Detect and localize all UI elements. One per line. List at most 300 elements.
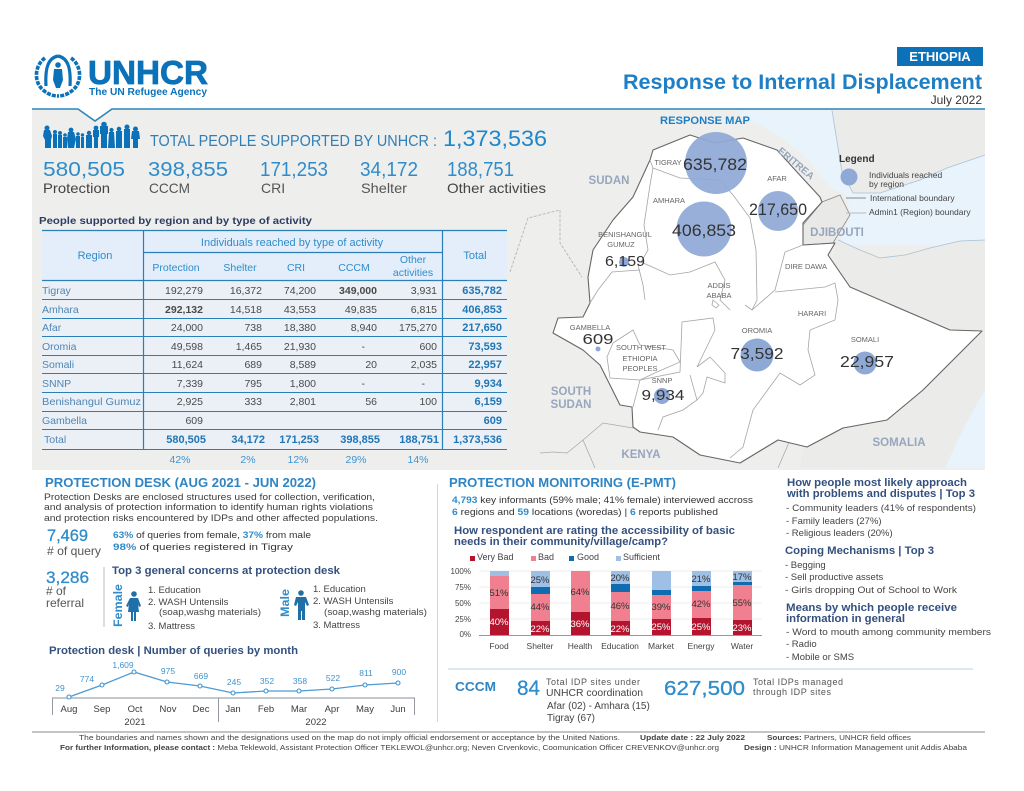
line chart: queries by month: 29 [55,683,65,693]
region labels: HARARI [798,309,826,318]
heading: queries by month: Protection desk | Number of queries by month [49,645,298,657]
country tag: ETHIOPIA [909,49,971,64]
list: approach: - Religious leaders (20%) [786,528,893,539]
bar: Education: 22% [610,624,630,635]
table row: Oromia: 21,930 [284,341,316,353]
figure: shelter [360,159,418,196]
bar: Shelter: 22% [530,624,550,635]
table row: Benishangul Gumuz: 6,159 [474,396,502,408]
stat: queries: 63% of queries from female, 37% from male [113,530,311,541]
table header: CCCM [338,262,370,274]
table row: percentages: 29% [345,454,367,466]
line chart: queries by month: 900 [392,667,406,677]
region labels: GAMBELLA [570,323,610,332]
region labels: ETHIOPIA [622,354,658,363]
table row: Tigray: 635,782 [462,285,502,297]
female concerns: 1. Education [148,585,201,596]
bubble: Tigray: 635,782 [683,155,747,174]
chart heading: How respondent are rating the accessibility of basic [454,525,735,537]
line chart: queries by month: 352 [260,676,274,686]
bar: Food [489,571,509,635]
list: information: - Word to mouth among community members [786,627,991,638]
description: and analysis of protection information to identify human rights violations [44,502,373,513]
table row: Tigray: 349,000 [339,285,377,297]
heading: PROTECTION MONITORING (E-PMT) [449,475,676,490]
Djibouti [803,195,850,245]
key informants text [452,495,753,518]
country labels: SOUTH [551,386,591,398]
bubble: Amhara [672,202,736,256]
female concerns: (soap,washg materials) [159,607,261,618]
key informants text: 6 regions and 59 locations (woredas) | 6 reports published [452,507,718,518]
table row: Afar [42,322,502,334]
stat: IDPs managed [664,677,843,700]
region labels: PEOPLES [622,364,658,373]
footer: The boundaries and names shown and the designations used on the map do not imply official endorsement or acceptance by the United Nations. [79,735,620,742]
figure: CCCM: 398,855 [148,159,228,181]
bar: Food: 51% [489,588,509,599]
bubble: Amhara: 406,853 [672,221,736,240]
map legend: International boundary [870,193,955,203]
heading: approach: How people most likely approach [787,477,967,489]
table row: Amhara: 43,553 [284,304,316,316]
table row: SNNP: SNNP [42,378,71,390]
table row: Total: Total [44,434,66,446]
table row: Afar: 24,000 [171,322,203,334]
figure: CRI [260,159,328,196]
bar: Shelter: 44% [530,602,550,613]
country labels: KENYA [621,449,661,461]
line chart: queries by month [52,660,415,728]
male concerns: 3. Mattress [313,620,360,631]
list: information: - Radio [786,639,817,650]
country labels: SUDAN [589,175,629,187]
footer: Design : UNHCR Information Management unit Addis Ababa [744,745,967,752]
stacked bar chart: Shelter [527,641,554,651]
table row: Total: 1,373,536 [453,434,502,446]
table row: Benishangul Gumuz: 2,801 [290,396,316,408]
male concerns [278,584,427,631]
line chart: queries by month: 811 [359,668,373,678]
table row: Amhara: 6,815 [411,304,437,316]
country labels [551,146,926,461]
table row: Total: 171,253 [279,434,319,446]
stacked bar chart: 50% [455,599,471,608]
heading: coping: Coping Mechanisms | Top 3 [785,545,934,557]
bubble: Somali [840,352,894,374]
bar: Health: 64% [570,587,590,598]
line chart: queries by month: 975 [161,666,175,676]
table row: Oromia: 600 [419,341,437,353]
figure: CRI: 171,253 [260,159,328,181]
lower right sea [945,390,985,468]
stat: referrals: # of [46,584,67,598]
region labels [570,158,879,385]
female concerns: 2. WASH Untensils [148,597,229,608]
bar: Energy [691,571,711,635]
region labels: SOUTH WEST [616,343,666,352]
bubble: Oromia [730,338,784,372]
table row: Benishangul Gumuz: 333 [244,396,262,408]
bar: Market [651,571,671,635]
table row: Benishangul Gumuz: 2,925 [177,396,203,408]
stat: IDP sites: 84 [517,677,540,700]
table row: Afar: 738 [244,322,262,334]
line chart: queries by month: Apr [325,704,339,715]
table row: Amhara [42,304,502,316]
figure: protection: Protection [43,180,110,196]
figure: CRI: CRI [261,180,285,196]
neighbouring borders [510,210,923,447]
table row: Gambella: Gambella [42,415,87,427]
table row: Gambella [42,415,502,427]
title block [623,47,983,107]
line chart: queries by month: Nov [160,704,177,715]
line chart: queries by month: Mar [291,704,307,715]
table row: SNNP [42,378,503,390]
line chart: queries by month: Jun [390,704,406,715]
table row: Somali: 22,957 [468,359,502,371]
table row: Tigray: 192,279 [165,285,203,297]
line chart: queries by month: Dec [193,704,210,715]
figure: other activities: Other activities [447,180,546,196]
table row: Oromia: Oromia [42,341,77,353]
bar: Education [610,571,630,635]
line chart: queries by month: Feb [258,704,274,715]
region labels: GUMUZ [607,240,635,249]
stat: referrals: 3,286 [46,568,89,587]
line chart: queries by month: Jan [225,704,241,715]
main title: Response to Internal Displacement [623,71,982,94]
region labels: AMHARA [653,196,685,205]
chart legend [470,552,660,562]
country labels: SUDAN [551,399,591,411]
table row: Benishangul Gumuz: 56 [365,396,377,408]
table row: Gambella: 609 [185,415,203,427]
country labels: DJIBOUTI [810,227,864,239]
region labels: SNNP [652,376,672,385]
table row: Total: 580,505 [166,434,206,446]
line chart: queries by month: 245 [227,677,241,687]
map legend: Legend [839,154,875,165]
key informants text: 4,793 key informants (59% male; 41% female) interviewed accross [452,495,753,506]
stat: IDP sites: Total IDP sites under [546,677,640,687]
stat: referrals [46,568,89,610]
figure: CCCM: CCCM [149,180,190,196]
heading: information: information in general [786,613,905,625]
line chart: queries by month: Sep [94,704,110,715]
region labels: ABABA [706,291,732,300]
list: approach [786,503,976,539]
bubble: Gambella: 609 [582,331,614,348]
table header: activities [393,267,433,279]
line chart: queries by month: 669 [194,671,208,681]
logo: UNHCR: UNHCR [88,54,208,91]
table row: percentages: 42% [169,454,191,466]
list: approach: - Family leaders (27%) [786,516,882,527]
bubble: SNNP: 9,934 [642,388,684,404]
bar: Education: 46% [610,601,630,612]
table row: Tigray: 16,372 [230,285,262,297]
table row: Oromia: - [362,341,366,353]
bar: Shelter [530,571,550,635]
chart legend: Sufficient [623,552,660,562]
table row: Tigray [42,285,502,297]
country tag [897,47,983,66]
country labels: SOMALIA [872,437,926,449]
stat: IDP sites: UNHCR coordination [546,688,643,699]
table header: Shelter [223,262,257,274]
table row: Benishangul Gumuz [42,396,502,408]
chart heading [454,525,735,548]
table row: SNNP: 7,339 [177,378,203,390]
table row: Total: 34,172 [231,434,265,446]
region labels: ADDIS [708,281,730,290]
stat: queries: 7,469 [47,526,88,545]
table header [78,237,487,279]
bar: Shelter: 25% [530,575,550,586]
region labels: SOMALI [851,335,879,344]
map: response map [510,110,985,468]
footer: Sources: Partners, UNHCR field offices [767,735,912,742]
panel: protection monitoring [449,475,762,651]
table row: Somali: Somali [42,359,74,371]
description [44,492,378,524]
line chart: queries by month: 522 [326,673,340,683]
figure: protection: 580,505 [43,159,125,181]
table row: percentages: 14% [407,454,429,466]
table row: Tigray: 74,200 [284,285,316,297]
bar: Energy: 25% [691,622,711,633]
table row: Amhara: 49,835 [345,304,377,316]
region labels: OROMIA [742,326,772,335]
table header: Individuals reached by type of activity [201,237,384,249]
stacked bar chart: Food [489,641,509,651]
Yemen coast [832,110,985,193]
headline: total people supported [43,122,547,151]
table row: Amhara: Amhara [42,304,79,316]
panel: protection desk [44,475,427,728]
panel: CCCM: CCCM [455,679,496,694]
date: July 2022 [931,93,982,107]
stat: referrals: referral [46,596,84,610]
footer: Update date : 22 July 2022 [640,735,745,742]
panel: CCCM [455,677,843,724]
country labels: ERITREA [775,146,816,182]
heading: information [786,602,957,625]
Ethiopia land [553,135,982,463]
footer: For further Information, please contact : Meba Teklewold, Assistant Protection Officer TEKLEWOL@unhcr.org; Neven Crvenkovic, Coomunication Officer CREVENKOV@unhcr.org [60,745,719,752]
bubble: Afar [749,191,807,231]
map legend: Individuals reached [869,170,943,180]
stacked bar chart: Market [648,641,675,651]
table row: Benishangul Gumuz: Benishangul Gumuz [42,396,141,408]
table row: Total: 398,855 [340,434,380,446]
stacked bar chart: Water [731,641,753,651]
icon: crowd of people [43,122,140,148]
stacked bar chart: Education [601,641,639,651]
region labels: TIGRAY [654,158,682,167]
heading: information: Means by which people receive [786,602,957,614]
stacked bar chart: 75% [455,583,471,592]
bar: Water: 17% [732,572,752,583]
figure: other activities [447,159,546,196]
table row: Oromia: 73,593 [468,341,502,353]
table header: Region [78,250,112,262]
table row: Afar: 175,270 [399,322,437,334]
footer [32,731,985,752]
chart heading: needs in their community/village/camp? [454,536,668,548]
line chart: queries by month: 1,609 [112,660,134,670]
table row: Tigray: 3,931 [411,285,437,297]
list: information [786,627,991,663]
bubble: Somali: 22,957 [840,354,894,371]
table row: Afar: 18,380 [284,322,316,334]
stat: IDP sites [517,677,650,724]
table header: Protection [152,262,200,274]
logo: UNHCR: The UN Refugee Agency [89,87,207,98]
headline: total people supported: TOTAL PEOPLE SUPPORTED BY UNHCR : [150,133,437,150]
stat: queries: # of query [47,544,101,558]
table row: Somali: 2,035 [411,359,437,371]
panel: grey summary and map background [32,109,985,470]
male concerns: Male [278,589,292,617]
bar: Health [570,571,590,635]
table row: percentages: 12% [287,454,309,466]
table row: Total [44,434,502,446]
table header: CRI [287,262,305,274]
table row: Benishangul Gumuz: 100 [419,396,437,408]
stat: IDPs managed: 627,500 [664,678,745,700]
bar: Health: 36% [570,619,590,630]
heading: approach: with problems and disputes | Top 3 [786,488,975,500]
bar: Market: 39% [651,602,671,613]
description: and protection risks encountered by IDPs and other affected populations. [44,513,378,524]
stat: IDPs managed: Total IDPs managed [753,677,843,687]
stat: queries: 98% of queries registered in Tigray [113,542,293,553]
bubble: Tigray [683,132,747,194]
table heading: People supported by region and by type of activity [39,215,312,227]
stacked bar chart: 0% [459,630,471,639]
table row: SNNP: - [422,378,426,390]
stat: IDP sites: Afar (02) - Amhara (15) [547,701,650,712]
stacked bar chart: 100% [451,567,471,576]
figure: other activities: 188,751 [447,159,514,181]
figure: CCCM [148,159,228,196]
panel: right column findings [785,477,991,663]
icon: male figure [294,590,309,620]
line chart: queries by month: 774 [80,674,94,684]
list: coping: - Sell productive assets [785,572,883,583]
stacked bar chart: Health [568,641,593,651]
icon: female figure [126,591,141,621]
table row: SNNP: 9,934 [474,378,503,390]
list: coping [785,560,957,596]
table row: Afar: 217,650 [462,322,502,334]
table row: SNNP: - [362,378,366,390]
table row: Tigray: Tigray [42,285,72,297]
list: approach: - Community leaders (41% of respondents) [786,503,976,514]
female concerns: 3. Mattress [148,621,195,632]
map legend: by region [869,179,904,189]
heading: PROTECTION DESK (AUG 2021 - JUN 2022) [45,475,316,490]
region labels: BENISHANGUL [598,230,652,239]
region labels: AFAR [767,174,787,183]
figure: protection [43,159,125,196]
Somalia coast [800,240,985,468]
map legend [839,154,971,217]
bar: Education: 20% [610,573,630,584]
table row: Total: 188,751 [399,434,439,446]
description: Protection Desks are enclosed structures used for collection, verification, [44,492,375,503]
chart legend: Good [577,552,599,562]
table row: Afar: Afar [42,322,62,334]
figure: shelter: Shelter [361,180,407,196]
logo: UNHCR [36,54,208,98]
icon: UNHCR wreath and sheltering hands [36,56,80,96]
region boundaries [590,160,838,458]
table header: Total [463,250,487,262]
table row: Gambella: 609 [484,415,502,427]
line chart: queries by month: Oct [128,704,143,715]
sea [740,110,985,245]
table row: Somali: 689 [244,359,262,371]
table row: Oromia: 49,598 [171,341,203,353]
stacked bar chart: 25% [455,615,471,624]
stacked bar chart: Energy [688,641,715,651]
stat: IDPs managed: through IDP sites [753,687,832,697]
table row: Somali [42,359,502,371]
line chart: queries by month: 2021 [124,717,146,728]
bubble: Oromia: 73,592 [730,346,784,363]
table row: percentages [169,454,429,466]
table row: SNNP: 795 [244,378,262,390]
stat: queries [47,526,311,558]
line chart: queries by month: 358 [293,676,307,686]
stacked bar chart [451,567,762,651]
table header: Other [400,254,427,266]
table row: Afar: 8,940 [351,322,377,334]
headline: total people supported: 1,373,536 [443,126,547,151]
figure: shelter: 34,172 [360,159,418,181]
figures by activity [43,159,546,196]
female concerns [111,584,261,632]
line chart: queries by month: 2022 [305,717,327,728]
table row: Oromia [42,341,502,353]
table row: Somali: 11,624 [172,359,203,371]
table row: Amhara: 292,132 [165,304,203,316]
bar: Market: 25% [651,622,671,633]
list: coping: - Begging [785,560,826,571]
bar: Water: 55% [732,598,752,609]
table: people supported by region and activity [42,230,507,466]
male concerns: 2. WASH Untensils [313,596,394,607]
map legend: Admin1 (Region) boundary [869,207,971,217]
male concerns: (soap,washg materials) [324,607,427,618]
bar: Energy: 42% [691,599,711,610]
table row: Somali: 20 [365,359,377,371]
bubble: Gambella [582,331,614,352]
bar: Water [732,571,752,635]
bar: Food: 40% [489,617,509,628]
list: information: - Mobile or SMS [786,652,854,663]
table row: percentages: 2% [240,454,256,466]
heading: approach [786,477,975,500]
label: map heading: RESPONSE MAP [660,115,750,127]
line chart: queries by month: Aug [61,704,77,715]
male concerns: 1. Education [313,584,366,595]
bar: Water: 23% [732,623,752,634]
